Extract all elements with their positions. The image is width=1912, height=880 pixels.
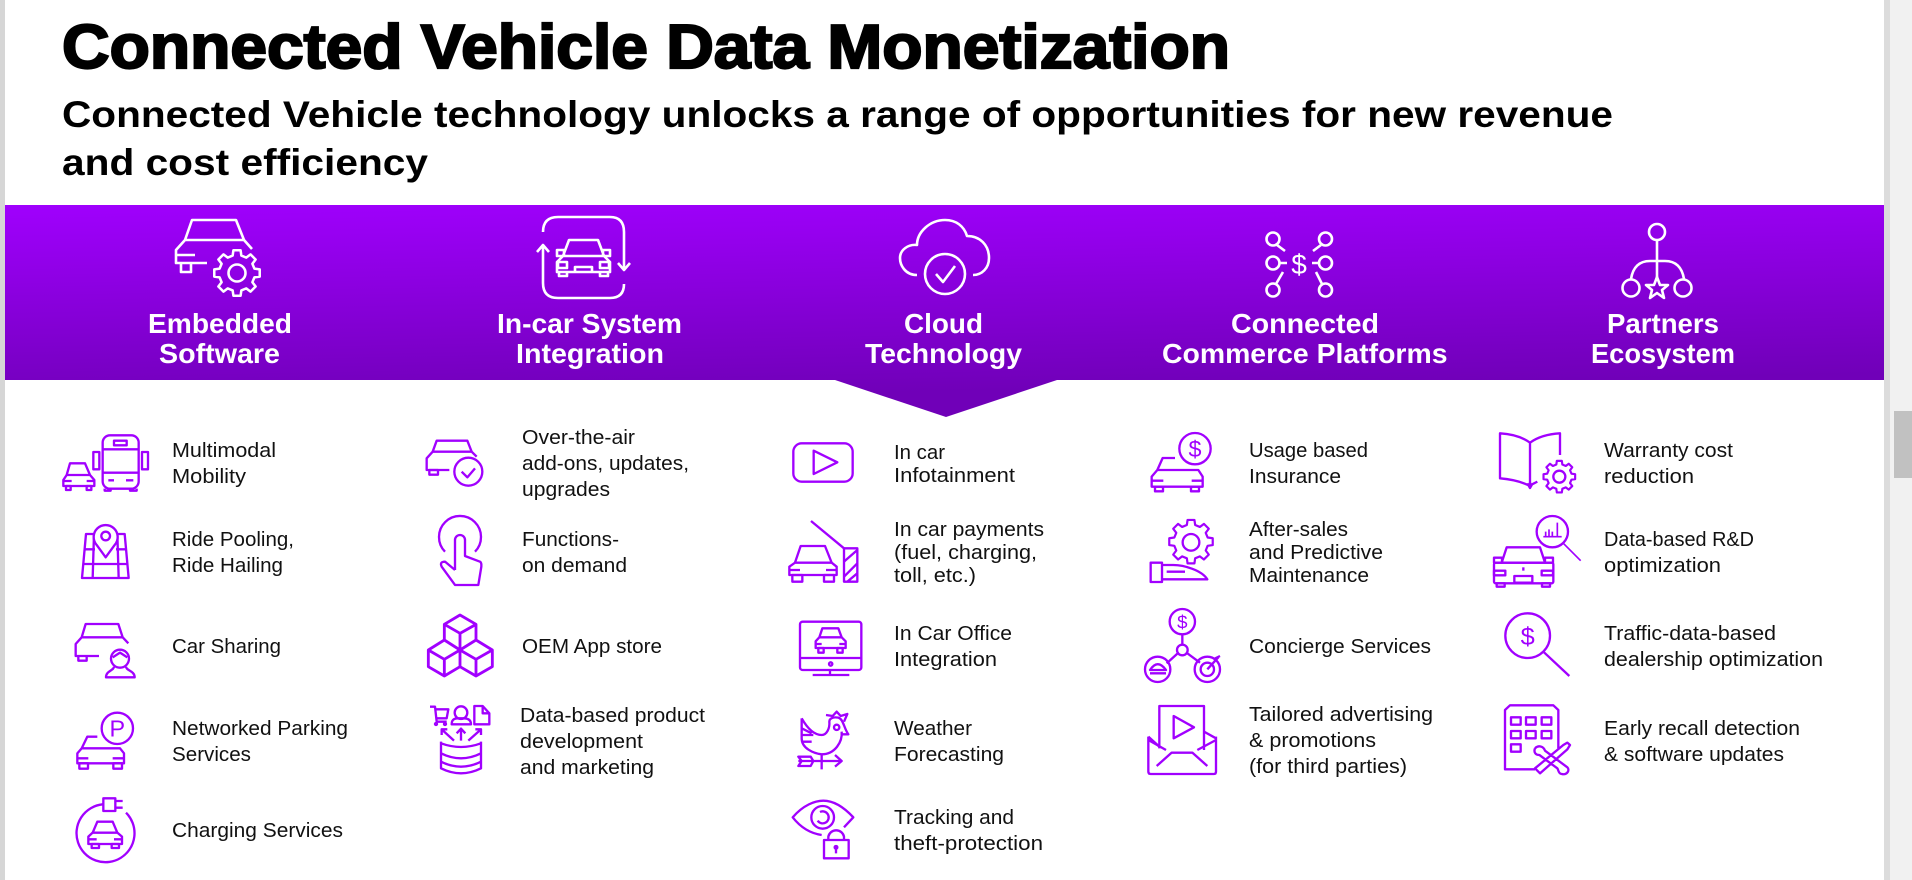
icon: car with rotating arrows <box>537 217 630 298</box>
label: Car Sharing: Car Sharing <box>172 636 281 658</box>
label: Usage based Insurance <box>1249 440 1368 488</box>
icon: car at toll barrier <box>789 521 857 582</box>
label: Over-the-air add-ons, updates, upgrades: add-ons, updates, <box>522 453 689 475</box>
label: Data-based R&D optimization: optimization <box>1604 555 1721 577</box>
icon: database with cart, person, document <box>430 706 489 773</box>
label: Early recall detection & software updates: Early recall detection <box>1604 718 1800 740</box>
icon: car with gear <box>176 220 260 296</box>
subtitle: and cost efficiency <box>62 142 428 183</box>
icon: car charging plug <box>77 798 135 862</box>
label: In car Infotainment: Infotainment <box>894 465 1015 487</box>
label: Tracking and theft-protection: Tracking and <box>894 807 1014 829</box>
heading: In-car System Integration: In-car System <box>497 308 682 339</box>
icon: car with magnified chart <box>1494 516 1581 587</box>
label: Weather Forecasting: Forecasting <box>894 744 1004 766</box>
icon: car and person <box>76 624 135 677</box>
label: Weather Forecasting: Weather <box>894 718 972 740</box>
label: Warranty cost reduction: Warranty cost <box>1604 440 1733 462</box>
label: Weather Forecasting <box>894 718 1004 766</box>
label: Data-based product development and marketing: and marketing <box>520 757 654 779</box>
label: In Car Office Integration <box>894 623 1012 671</box>
icon: car with check mark <box>427 441 482 486</box>
icon: magnifier with dollar: $ <box>1521 623 1535 651</box>
label: Networked Parking Services: Services <box>172 744 251 766</box>
label: After-sales and Predictive Maintenance <box>1249 519 1383 587</box>
label: Tailored advertising & promotions <box>1249 704 1433 778</box>
heading: Connected Commerce Platforms <box>1162 308 1448 369</box>
panel: Embedded Software items <box>63 435 348 862</box>
icon: building with tools <box>1505 705 1570 774</box>
subtitle: Connected Vehicle technology unlocks a range of opportunities for new revenue <box>62 94 1613 135</box>
label: Traffic-data-based dealership optimization <box>1604 623 1823 671</box>
label: Over-the-air add-ons, updates, upgrades <box>522 427 689 501</box>
label: After-sales and Predictive Maintenance: After-sales <box>1249 519 1348 541</box>
icon: stacked cubes <box>428 615 492 676</box>
label: Concierge Services: Concierge Services <box>1249 636 1431 658</box>
label: In Car Office Integration: Integration <box>894 649 997 671</box>
label: Functions-on demand <box>522 529 627 577</box>
icon: dollar network: $ <box>1291 249 1307 280</box>
icon: gear over hand <box>1151 520 1213 582</box>
icon: bus and car <box>63 435 148 491</box>
label: Early recall detection & software updates: & software updates <box>1604 744 1784 766</box>
label: Networked Parking Services <box>172 718 348 766</box>
title: Connected Vehicle Data Monetization <box>62 13 1230 82</box>
label: Tracking and theft-protection <box>894 807 1043 855</box>
icon: concierge network: $ <box>1177 611 1188 632</box>
icon: car and parking sign: P <box>110 716 125 742</box>
heading: Cloud Technology: Technology <box>865 338 1023 369</box>
label: Data-based R&D optimization: Data-based R&D <box>1604 529 1754 551</box>
icon: manual book with gear <box>1500 433 1575 492</box>
icon: play screen <box>793 443 853 482</box>
label: Tailored advertising & promotions: (for third parties) <box>1249 756 1407 778</box>
label: Multimodal Mobility: Mobility <box>172 466 246 488</box>
column header: Cloud Technology <box>865 220 1023 369</box>
label: Data-based product development and marketing: Data-based product <box>520 705 705 727</box>
column header: In-car System Integration <box>497 217 682 369</box>
purple header band with pointer <box>5 205 1884 417</box>
column header: Connected Commerce Platforms <box>1162 232 1448 369</box>
label: In car payments: toll, etc.) <box>894 565 976 587</box>
label: Early recall detection & software updates <box>1604 718 1800 766</box>
label: After-sales and Predictive Maintenance: and Predictive <box>1249 542 1383 564</box>
label: Ride Pooling, Ride Hailing: Ride Hailing <box>172 555 283 577</box>
label: Data-based product development and marketing: development <box>520 731 643 753</box>
icon: car with dollar coin: $ <box>1189 436 1202 462</box>
subtitle <box>62 94 1613 183</box>
label: Ride Pooling, Ride Hailing: Ride Pooling, <box>172 529 294 551</box>
label: Data-based R&D optimization <box>1604 529 1754 577</box>
heading: In-car System Integration: Integration <box>516 338 664 369</box>
icon: partner tree with star <box>1622 224 1692 298</box>
label: Tailored advertising & promotions: & promotions <box>1249 730 1376 752</box>
label: Usage based Insurance: Usage based <box>1249 440 1368 462</box>
label: Ride Pooling, Ride Hailing <box>172 529 294 577</box>
icon: rooster weather vane <box>798 712 848 769</box>
heading: Embedded Software <box>148 308 292 369</box>
label: In car Infotainment <box>894 442 1015 487</box>
icon: envelope with play <box>1148 706 1216 774</box>
heading: Partners Ecosystem: Ecosystem <box>1591 338 1735 369</box>
heading: Partners Ecosystem <box>1591 308 1735 369</box>
scrollbar thumb <box>1894 411 1912 478</box>
label: In car payments: In car payments <box>894 519 1044 541</box>
icon: concierge network <box>1145 609 1220 682</box>
label: In car Infotainment: In car <box>894 442 945 464</box>
heading: Embedded Software: Software <box>159 338 280 369</box>
heading: In-car System Integration <box>497 308 682 369</box>
label: Charging Services: Charging Services <box>172 820 343 842</box>
panel: Partners Ecosystem items <box>1494 433 1823 774</box>
label: Warranty cost reduction <box>1604 440 1733 488</box>
heading: Connected Commerce Platforms: Connected <box>1231 308 1379 339</box>
heading: Cloud Technology <box>865 308 1023 369</box>
icon: car with dollar coin <box>1152 433 1211 491</box>
label: After-sales and Predictive Maintenance: Maintenance <box>1249 565 1369 587</box>
label: Data-based product development and marketing <box>520 705 705 779</box>
label: Tailored advertising & promotions: Tailored advertising <box>1249 704 1433 726</box>
panel: Connected Commerce Platforms items <box>1145 433 1433 778</box>
heading: Connected Commerce Platforms: Commerce Platforms <box>1162 338 1448 369</box>
icon: eye with padlock <box>793 801 853 858</box>
label: Traffic-data-based dealership optimization: Traffic-data-based <box>1604 623 1776 645</box>
label: Functions-on demand: Functions- <box>522 529 619 551</box>
label: In Car Office Integration: In Car Office <box>894 623 1012 645</box>
label: In car payments: (fuel, charging, <box>894 542 1037 564</box>
label: Usage based Insurance: Insurance <box>1249 466 1341 488</box>
icon: magnifier with dollar <box>1505 613 1569 676</box>
heading: Cloud Technology: Cloud <box>904 308 983 339</box>
label: Functions-on demand: on demand <box>522 555 627 577</box>
label: Over-the-air add-ons, updates, upgrades: Over-the-air <box>522 427 635 449</box>
icon: pointing finger <box>439 516 481 585</box>
icon: map pin <box>82 525 129 578</box>
label: Networked Parking Services: Networked Parking <box>172 718 348 740</box>
label: Over-the-air add-ons, updates, upgrades: upgrades <box>522 479 610 501</box>
panel: Cloud Technology items <box>789 442 1044 858</box>
label: In car payments <box>894 519 1044 587</box>
label: Multimodal Mobility: Multimodal <box>172 440 276 462</box>
label: Traffic-data-based dealership optimization: dealership optimization <box>1604 649 1823 671</box>
panel: In-car System Integration items <box>427 427 705 779</box>
heading: Embedded Software: Embedded <box>148 308 292 339</box>
column header: Embedded Software <box>148 220 292 369</box>
heading: Partners Ecosystem: Partners <box>1607 308 1719 339</box>
icon: car and parking sign <box>77 713 133 769</box>
label: Multimodal Mobility <box>172 440 276 488</box>
icon: monitor with car <box>800 622 861 675</box>
label: Tracking and theft-protection: theft-protection <box>894 833 1043 855</box>
icon: dollar network <box>1266 232 1332 296</box>
column header: Partners Ecosystem <box>1591 224 1735 369</box>
icon: cloud with check <box>900 220 989 294</box>
label: OEM App store: OEM App store <box>522 636 662 658</box>
label: Warranty cost reduction: reduction <box>1604 466 1694 488</box>
